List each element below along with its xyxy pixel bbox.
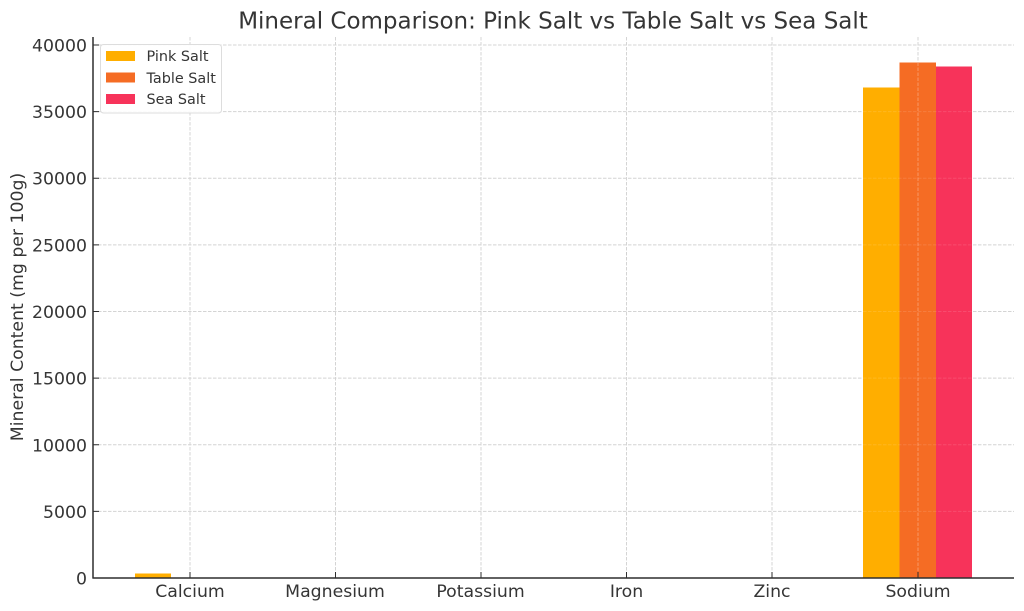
- x-axis category labels: Zinc: [753, 582, 791, 602]
- title: Mineral Comparison: Pink Salt vs Table Salt vs Sea Salt: [238, 8, 868, 34]
- y-axis tick labels: 10000: [32, 436, 87, 456]
- bars: calcium: [135, 574, 171, 578]
- y-axis tick labels: 15000: [32, 370, 87, 390]
- y-axis tick labels: 20000: [32, 303, 87, 323]
- legend: Table Salt: [146, 71, 216, 87]
- y-axis tick labels: [32, 36, 87, 590]
- x-axis category labels: Sodium: [885, 582, 951, 602]
- bars: sodium: [863, 62, 972, 578]
- x-axis category labels: Calcium: [155, 582, 225, 602]
- y-axis title: Mineral Content (mg per 100g): [8, 173, 28, 441]
- x-axis category labels: Magnesium: [285, 582, 385, 602]
- legend: Pink Salt: [146, 49, 209, 65]
- axes: [92, 37, 1014, 578]
- y-axis tick labels: 30000: [32, 170, 87, 190]
- y-axis tick labels: 35000: [32, 103, 87, 123]
- y-axis tick labels: 5000: [43, 503, 87, 523]
- x-axis category labels: Potassium: [436, 582, 525, 602]
- y-axis tick labels: 0: [76, 570, 87, 590]
- legend: Sea Salt: [146, 92, 206, 108]
- y-axis tick labels: 25000: [32, 236, 87, 256]
- y-axis tick labels: 40000: [32, 36, 87, 56]
- x-axis category labels: [155, 582, 951, 602]
- x-axis category labels: Iron: [610, 582, 643, 602]
- legend: [100, 44, 222, 113]
